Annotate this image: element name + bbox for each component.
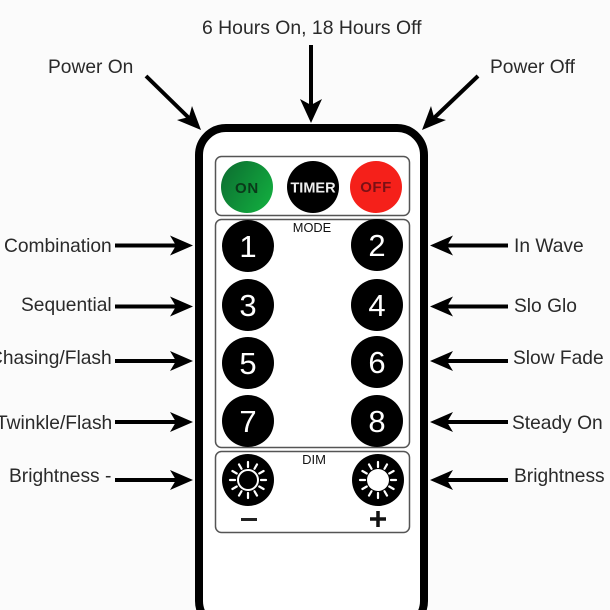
- arrow: power off: [422, 76, 478, 130]
- button: TIMER: TIMER: [290, 180, 336, 196]
- arrow: chasing/flash: [115, 351, 193, 371]
- label: Combination: Combination: [4, 236, 112, 257]
- button 4: 4: [368, 288, 386, 323]
- arrow: brightness plus: [430, 470, 508, 490]
- icon: plus: [370, 511, 386, 527]
- remote body: [199, 128, 424, 610]
- button 5: [222, 337, 274, 389]
- label: 6 Hours On, 18 Hours Off: 6 Hours On, 18 Hours Off: [202, 17, 422, 39]
- button 2: [351, 219, 403, 271]
- panel: power buttons: [216, 156, 410, 216]
- heading: MODE: MODE: [293, 220, 331, 235]
- label: Slo Glo: Slo Glo: [514, 296, 577, 317]
- button 8: 8: [368, 404, 386, 439]
- button 8: [351, 395, 403, 447]
- panel: mode buttons: [216, 219, 410, 448]
- label: Power Off: Power Off: [490, 57, 576, 78]
- button 2: 2: [368, 228, 386, 263]
- button 6: [351, 336, 403, 388]
- label: Slow Fade: Slow Fade: [513, 348, 604, 369]
- label: In Wave: In Wave: [514, 236, 584, 257]
- arrow: steady on: [430, 412, 508, 432]
- button 7: 7: [239, 404, 257, 439]
- label: Sequential: Sequential: [21, 295, 112, 316]
- arrow: sequential: [115, 296, 193, 316]
- button 1: [222, 220, 274, 272]
- arrow: brightness minus: [115, 470, 193, 490]
- arrow: slow fade: [430, 351, 508, 371]
- arrow: slo glo: [430, 296, 508, 316]
- label: Power On: Power On: [48, 57, 133, 78]
- label: Steady On: Steady On: [512, 413, 603, 434]
- heading: DIM: DIM: [302, 452, 326, 467]
- arrow: combination: [115, 236, 193, 256]
- button: ON: [221, 161, 273, 213]
- button: dim up: [352, 454, 404, 506]
- icon: minus: [241, 518, 257, 521]
- button: TIMER: [287, 161, 339, 213]
- arrow: power on: [146, 76, 201, 130]
- button 7: [222, 395, 274, 447]
- button 6: 6: [368, 345, 386, 380]
- button 5: 5: [239, 346, 257, 381]
- arrow: in wave: [430, 236, 508, 256]
- button: OFF: OFF: [360, 179, 392, 196]
- arrow: twinkle/flash: [115, 412, 193, 432]
- arrow: timer: [300, 45, 322, 123]
- panel: dim buttons: [216, 452, 410, 532]
- button 3: 3: [239, 288, 257, 323]
- button: ON: ON: [235, 180, 259, 197]
- button: dim down: [222, 454, 274, 506]
- label: Brightness -: Brightness -: [9, 466, 111, 487]
- button: OFF: [350, 161, 402, 213]
- button 3: [222, 279, 274, 331]
- button 4: [351, 279, 403, 331]
- button 1: 1: [239, 229, 257, 264]
